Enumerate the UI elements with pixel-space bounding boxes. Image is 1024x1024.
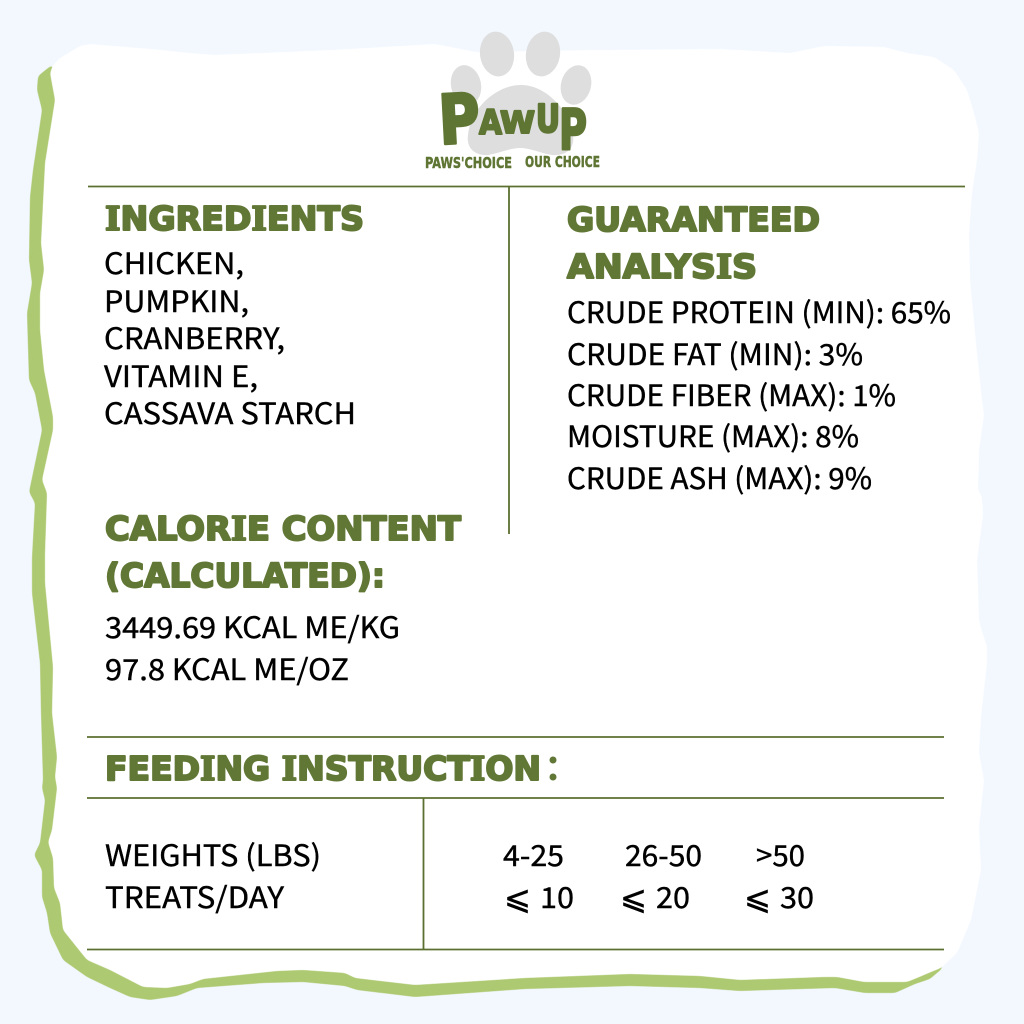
logo wordmark: A bbox=[479, 103, 503, 143]
panel: ingredients bbox=[104, 199, 364, 433]
logo wordmark: P bbox=[437, 80, 482, 161]
ingredients list: VITAMIN E, bbox=[104, 354, 258, 396]
ingredients list: CRANBERRY, bbox=[104, 316, 285, 358]
treats per day bbox=[504, 871, 814, 919]
heading: calorie content: (CALCULATED): bbox=[105, 556, 385, 595]
treats per day: 20 bbox=[656, 875, 690, 917]
weight ranges: 4-25 bbox=[503, 833, 564, 875]
table row labels: WEIGHTS (LBS) bbox=[105, 833, 321, 875]
panel: guaranteed analysis bbox=[567, 200, 951, 498]
logo tagline: OUR CHOICE bbox=[525, 153, 600, 171]
treats per day: 30 bbox=[780, 875, 814, 917]
analysis values: CRUDE FIBER (MAX): 1% bbox=[567, 373, 896, 415]
logo wordmark: W bbox=[500, 106, 535, 141]
heading: feeding instruction: FEEDING INSTRUCTION bbox=[105, 749, 541, 788]
analysis values: CRUDE PROTEIN (MIN): 65% bbox=[567, 290, 951, 332]
icon: grey paw print bbox=[447, 29, 596, 155]
treats per day: ⩽ bbox=[504, 871, 531, 919]
logo tagline: PAWS'CHOICE bbox=[425, 154, 512, 172]
calorie values bbox=[105, 605, 400, 689]
heading: calorie content: CALORIE CONTENT bbox=[105, 509, 461, 548]
ingredients list: CHICKEN, bbox=[104, 241, 244, 283]
weight ranges: 26-50 bbox=[625, 833, 702, 875]
panel: feeding instruction bbox=[105, 749, 814, 919]
treats per day: ⩽ bbox=[620, 871, 647, 919]
calorie values: 97.8 KCAL ME/OZ bbox=[105, 647, 349, 689]
calorie values: 3449.69 KCAL ME/KG bbox=[105, 605, 400, 647]
treats per day: 10 bbox=[540, 875, 574, 917]
logo wordmark bbox=[437, 80, 587, 163]
heading: guaranteed analysis bbox=[567, 200, 820, 286]
analysis values: CRUDE FAT (MIN): 3% bbox=[567, 332, 863, 374]
table rules bbox=[87, 186, 965, 950]
heading: guaranteed analysis: ANALYSIS bbox=[567, 247, 757, 286]
ingredients list: PUMPKIN, bbox=[104, 279, 249, 321]
analysis values: CRUDE ASH (MAX): 9% bbox=[567, 456, 872, 498]
analysis values bbox=[567, 290, 951, 498]
heading: calorie content bbox=[105, 509, 461, 595]
logo wordmark: P bbox=[559, 98, 587, 163]
logo tagline bbox=[425, 153, 600, 172]
logo bbox=[425, 29, 600, 172]
logo wordmark: U bbox=[536, 97, 560, 141]
ingredients list bbox=[104, 241, 356, 433]
treats per day: ⩽ bbox=[744, 871, 771, 919]
weight ranges: >50 bbox=[756, 833, 805, 875]
table row labels bbox=[105, 833, 321, 917]
analysis values: MOISTURE (MAX): 8% bbox=[567, 414, 859, 456]
weight ranges bbox=[503, 833, 805, 875]
heading: ingredients: INGREDIENTS bbox=[105, 199, 364, 238]
table row labels: TREATS/DAY bbox=[105, 875, 285, 917]
ingredients list: CASSAVA STARCH bbox=[104, 391, 356, 433]
heading: guaranteed analysis: GUARANTEED bbox=[567, 200, 820, 239]
panel: calorie content bbox=[105, 509, 461, 689]
